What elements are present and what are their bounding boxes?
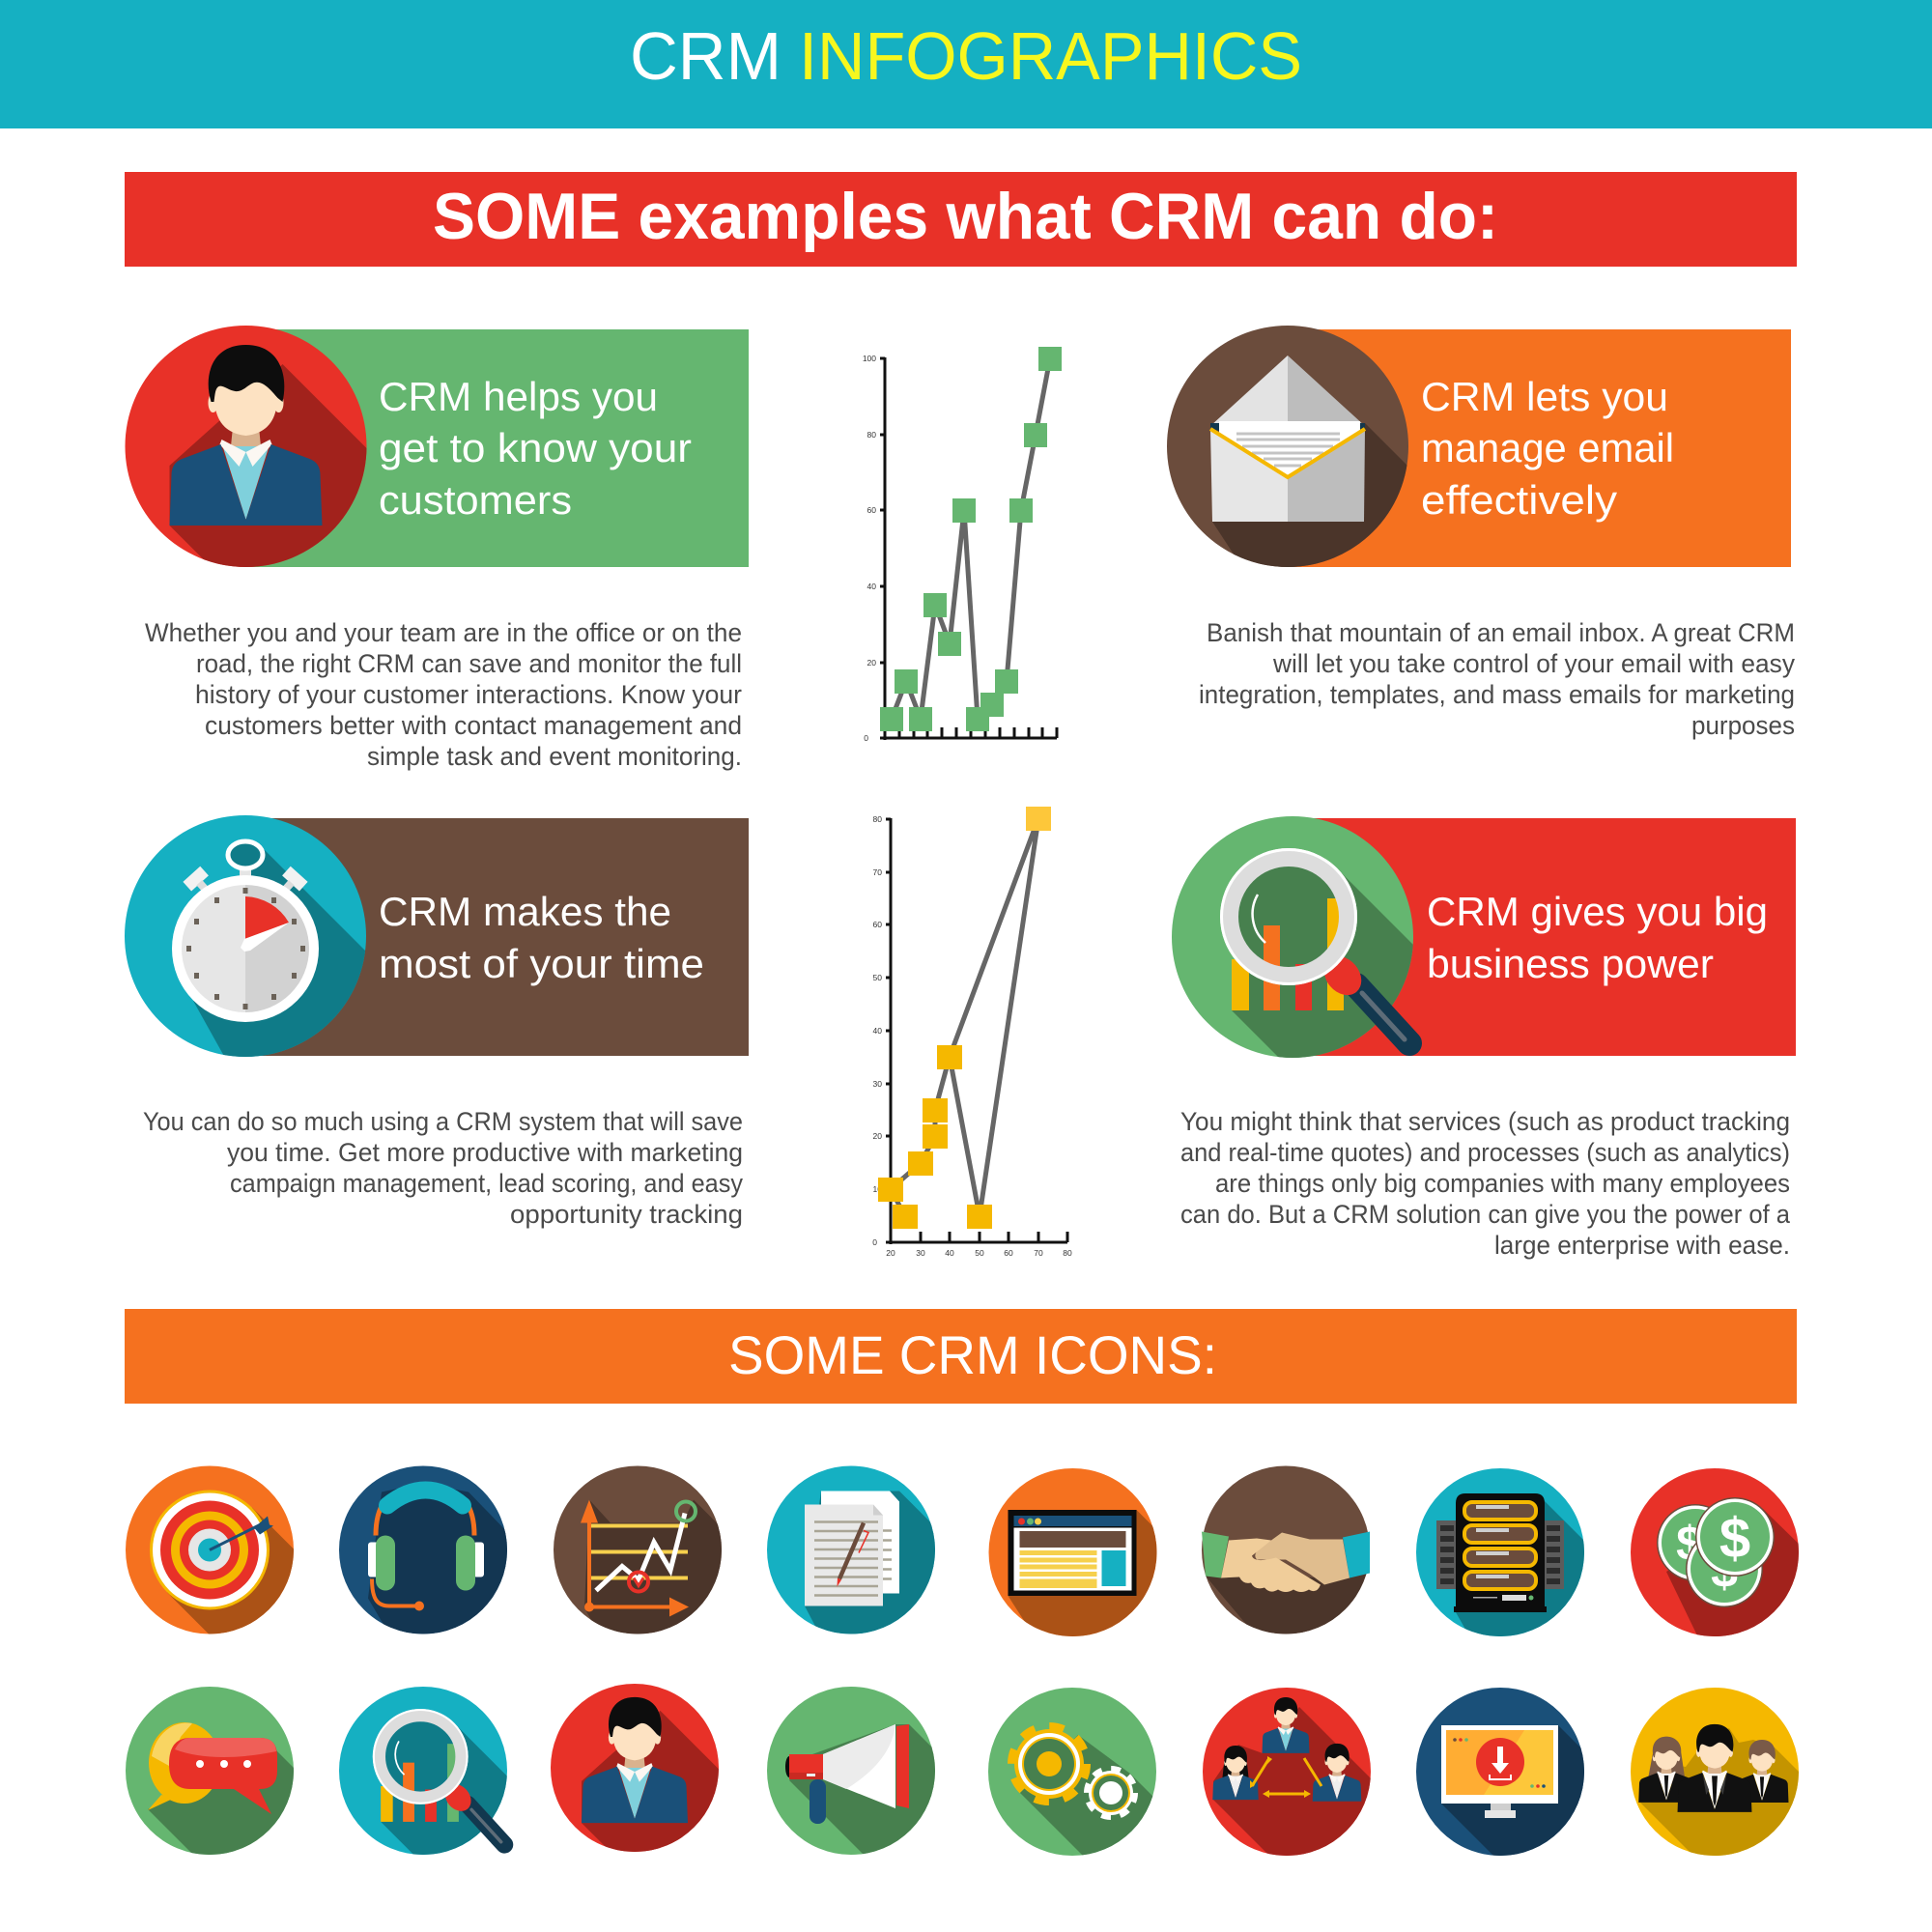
- body text: [1180, 1107, 1791, 1260]
- banner: some examples: [125, 172, 1797, 267]
- icon: server: [1416, 1468, 1584, 1636]
- body text: You can do so much using a CRM system that will save: [143, 1107, 743, 1136]
- heading: [1427, 889, 1768, 986]
- body text: you time. Get more productive with marketing: [227, 1138, 743, 1167]
- chart: yellow line chart: 40: [873, 1026, 882, 1036]
- heading: effectively: [1421, 477, 1617, 523]
- body text: customers better with contact management and: [205, 711, 742, 740]
- heading: manage email: [1421, 425, 1674, 470]
- body text: and real-time quotes) and processes (such as analytics): [1180, 1138, 1790, 1167]
- chart: green line chart: 0: [864, 733, 868, 743]
- icon: dollar coins: $: [1719, 1507, 1750, 1570]
- body text: history of your customer interactions. Know your: [195, 680, 742, 709]
- icon: stopwatch: [125, 815, 366, 1057]
- body text: can do. But a CRM solution can give you the power of a: [1180, 1200, 1791, 1229]
- panel: time: [125, 815, 749, 1229]
- chart: yellow line chart: 70: [1034, 1248, 1043, 1258]
- banner: some crm icons: SOME CRM ICONS:: [728, 1324, 1217, 1385]
- icon: team network: [1203, 1688, 1371, 1856]
- heading: business power: [1427, 941, 1714, 986]
- panel: business power: [1172, 816, 1796, 1260]
- body text: simple task and event monitoring.: [367, 742, 742, 771]
- chart: yellow line chart: 20: [873, 1131, 882, 1141]
- body text: You might think that services (such as product tracking: [1180, 1107, 1790, 1136]
- icon: documents and pen: [767, 1466, 935, 1634]
- chart: green line chart: 60: [867, 505, 876, 515]
- body text: large enterprise with ease.: [1494, 1231, 1790, 1260]
- heading: CRM gives you big: [1427, 889, 1768, 934]
- chart: green line chart: [863, 347, 1062, 743]
- chart: yellow line chart: 30: [873, 1079, 882, 1089]
- chart: yellow line chart: 10: [873, 1184, 882, 1194]
- icon: magnifier: [339, 1687, 514, 1855]
- header band: [0, 0, 1932, 128]
- chart: yellow line chart: 70: [873, 867, 882, 877]
- body text: purposes: [1691, 711, 1795, 740]
- heading: [1421, 374, 1674, 523]
- body text: [1199, 618, 1795, 740]
- icon: envelope: [1167, 326, 1408, 567]
- chart: yellow line chart: 80: [873, 814, 882, 824]
- icon: growth chart: [554, 1466, 722, 1634]
- panel: know your customers: [126, 326, 749, 771]
- body text: road, the right CRM can save and monitor the full: [196, 649, 742, 678]
- body text: Banish that mountain of an email inbox. A great CRM: [1207, 618, 1795, 647]
- icon: handshake: [1202, 1466, 1370, 1634]
- icon: headset: [339, 1466, 507, 1634]
- chart: yellow line chart: 50: [975, 1248, 984, 1258]
- icon: businessman: [126, 326, 367, 567]
- icon: target: [126, 1466, 294, 1634]
- heading: CRM makes the: [379, 889, 671, 934]
- icon: download monitor: [1416, 1688, 1584, 1856]
- icon: business team: [1631, 1688, 1799, 1856]
- chart: yellow line chart: 60: [1004, 1248, 1013, 1258]
- chart: yellow line chart: 30: [916, 1248, 925, 1258]
- chart: green line chart: 80: [867, 430, 876, 440]
- chart: yellow line chart: 50: [873, 973, 882, 982]
- banner: some crm icons: [125, 1309, 1797, 1404]
- icon: dollar coins: $: [1711, 1544, 1738, 1598]
- chart: green line chart: 20: [867, 658, 876, 668]
- body text: campaign management, lead scoring, and easy: [230, 1169, 743, 1198]
- icon: dollar coins: [1631, 1468, 1799, 1636]
- body text: Whether you and your team are in the office or on the: [145, 618, 742, 647]
- body text: integration, templates, and mass emails for marketing: [1199, 680, 1795, 709]
- icon: businessman small: [551, 1684, 719, 1852]
- chart: yellow line chart: [872, 807, 1072, 1258]
- icon: browser window: [989, 1468, 1157, 1636]
- chart: green line chart: 100: [863, 354, 876, 363]
- body text: opportunity tracking: [510, 1200, 743, 1229]
- heading: CRM lets you: [1421, 374, 1668, 419]
- heading: customers: [379, 477, 572, 523]
- panel: manage email: [1167, 326, 1795, 740]
- heading: CRM helps you: [379, 374, 658, 419]
- chart: yellow line chart: 20: [886, 1248, 895, 1258]
- title: INFOGRAPHICS: [799, 18, 1302, 94]
- body text: [145, 618, 742, 771]
- banner: red: [1293, 818, 1796, 1056]
- banner: orange: [1288, 329, 1791, 567]
- icon: chat bubbles: [126, 1687, 294, 1855]
- banner: green: [245, 329, 749, 567]
- chart: yellow line chart: 80: [1063, 1248, 1072, 1258]
- heading: most of your time: [379, 941, 704, 986]
- banner: some examples: SOME examples what CRM can do:: [433, 180, 1498, 253]
- chart: yellow line chart: 0: [872, 1237, 877, 1247]
- title: CRM: [630, 18, 781, 94]
- chart: yellow line chart: 40: [945, 1248, 954, 1258]
- heading: get to know your: [379, 425, 692, 470]
- body text: [143, 1107, 743, 1229]
- icon: dollar coins: $: [1676, 1517, 1703, 1571]
- chart: yellow line chart: 60: [873, 920, 882, 929]
- heading: [379, 889, 704, 986]
- heading: [379, 374, 692, 523]
- banner: brown: [245, 818, 749, 1056]
- icon: gears: [988, 1688, 1156, 1856]
- chart: green line chart: 40: [867, 582, 876, 591]
- icon: magnifier with bars: [1172, 816, 1422, 1058]
- body text: will let you take control of your email with easy: [1272, 649, 1795, 678]
- body text: are things only big companies with many employees: [1215, 1169, 1790, 1198]
- icon: megaphone: [767, 1687, 935, 1855]
